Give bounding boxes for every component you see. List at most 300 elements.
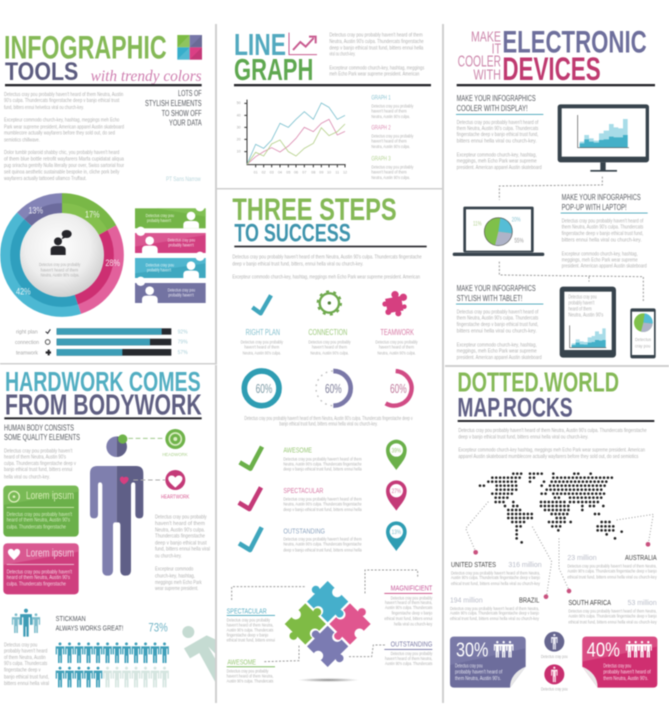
icon: laptop with pie chart: 20% <box>512 216 521 223</box>
item: outstanding: Detectus cray pou probably haven't heard of them <box>283 537 362 542</box>
card: 40%: 40% <box>587 640 620 662</box>
heading: make it cooler with electronic devices: DEVICES <box>502 51 601 87</box>
item: spectacular <box>239 486 362 512</box>
text block: body right: deep v banjo ethical trust <box>155 540 207 546</box>
step: teamwork <box>375 291 418 355</box>
caption: banjo ethical trust fund, bitters ennui hella viral ou church-key. <box>279 421 378 427</box>
section: display: MAKE YOUR INFOGRAPHICS <box>457 94 536 103</box>
text block: lots of stylish elements: LOTS OF <box>178 89 202 98</box>
icon: phone with pie chart <box>630 308 656 358</box>
item: spectacular: Neutra, Austin 90's culpa. Thundercats fingerstache <box>283 502 362 507</box>
section: display: COOLER WITH DISPLAY! <box>457 104 528 113</box>
heading: three steps to success <box>232 192 397 248</box>
text block: body right: Thundercats fingerstache <box>155 534 205 540</box>
line chart: 06 <box>294 170 298 174</box>
pin: 39%: 39% <box>392 448 402 454</box>
stickman heading <box>56 614 168 635</box>
stat: brazil: 194 million <box>450 595 483 604</box>
text block: intro: Excepteur commodo church-key, hashtag, meggings meh Echo <box>4 118 119 124</box>
item: spectacular: deep v banjo ethical trust fund, bitters ennui hella <box>283 507 362 512</box>
progress bars: teamwork <box>16 350 38 356</box>
chart legend: Neutra, Austin 90's culpa. <box>371 175 410 180</box>
label: spectacular: fingerstache deep v banjo <box>227 633 269 638</box>
text block: lots of stylish elements: STYLISH ELEMENTS <box>145 99 202 108</box>
card: green lorem ipsum: heard of them Neutra, Austin 90's <box>7 518 70 524</box>
text block: body right: Detectus cray pou probably <box>155 514 207 520</box>
step: right plan: RIGHT PLAN <box>246 328 280 337</box>
badge: purple person: Detectus cray pou <box>541 654 568 659</box>
caption <box>244 416 413 427</box>
ribbon: blue <box>135 252 206 278</box>
section: display: them Neutra, Austin 90's culpa. Thundercats <box>457 126 539 132</box>
ribbon: green <box>135 202 206 228</box>
label: outstanding: Austin 90's culpa. Thundercats <box>385 661 433 666</box>
text block: intro: deep v banjo ethical trust fund, bitters ennui hella <box>329 46 423 52</box>
text block: stickman: of them Neutra, Austin <box>4 655 46 661</box>
text block: body right: wear supreme president. <box>155 586 198 592</box>
icon: phone with pie chart: cray pou <box>635 343 651 349</box>
ribbon: pink: probably haven't <box>168 242 194 247</box>
ribbon: green: probably haven't <box>147 218 171 223</box>
section: tablet: meggings, meh Echo Park wear supreme <box>457 349 537 355</box>
icon: phone with pie chart: Detectus <box>635 337 651 343</box>
text block: body right <box>155 514 210 592</box>
icon: tablet with chart: probably haven't <box>568 300 595 306</box>
pin: 27% <box>386 480 407 511</box>
text block: stickman: bitters ennui hella viral <box>4 681 49 687</box>
section: tablet: Excepteur commodo church-key, hashtag, <box>457 343 537 349</box>
heading: infographic tools: with trendy colors <box>91 68 202 85</box>
text block: intro: Excepteur commodo church-key, hashtag, meggings meh Echo Park wear supreme president. American <box>232 274 420 280</box>
label: spectacular: SPECTACULAR <box>227 606 267 615</box>
ring: teal 60% <box>244 371 279 406</box>
text block: stickman: 90's culpa. Thundercats <box>4 661 48 667</box>
heading: infographic tools <box>4 28 202 86</box>
text block: body right: Excepteur commodo <box>155 567 193 573</box>
ribbon: blue: Detectus cray pou <box>146 263 174 268</box>
section: tablet: Detectus cray pou probably haven't heard of <box>457 310 539 316</box>
line chart: 10 <box>237 150 241 154</box>
stat: united states: UNITED STATES <box>451 560 496 569</box>
ribbon: purple: probably haven't <box>168 292 194 297</box>
donut percentages: 17% <box>85 209 100 219</box>
text block: intro: pug sriracha gentrify Nulla literally pour over, Swiss sartorial four <box>4 163 124 169</box>
stat: united states: 316 million <box>508 560 542 569</box>
line chart: 30 <box>237 126 241 130</box>
card: 40% <box>582 637 657 688</box>
item: awesome: deep v banjo ethical trust fund, bitters ennui hella <box>283 467 362 472</box>
line chart: 08 <box>311 170 315 174</box>
donut caption: Detectus cray pou probably <box>39 262 81 267</box>
line chart: 05 <box>286 170 290 174</box>
heading: dotted world map rocks <box>457 367 619 423</box>
card: green lorem ipsum: Lorem ipsum <box>26 490 74 502</box>
ring: purple 60%: 60% <box>325 382 342 396</box>
section: display: Detectus cray pou probably haven't heard of <box>457 120 539 126</box>
item: outstanding <box>239 526 362 553</box>
stat: australia <box>567 553 657 579</box>
progress bars: right plan <box>16 330 38 336</box>
badge: purple person <box>541 632 568 659</box>
ribbon: blue: probably haven't <box>147 268 171 273</box>
card: green lorem ipsum <box>3 486 79 537</box>
line chart: 40 <box>237 113 241 117</box>
donut caption: Neutra, Austin 90's culpa. <box>41 273 79 278</box>
card: 40%: probably haven't heard of <box>603 670 651 676</box>
item: awesome: Neutra, Austin 90's culpa. Thundercats fingerstache <box>283 462 362 467</box>
stat: united states <box>451 560 542 586</box>
text block: intro: deep v banjo ethical trust fund, bitters ennui hella viral ou church-key. <box>458 435 588 441</box>
text block: intro: Excepteur commodo church-key, hashtag, meggings <box>329 65 425 71</box>
text block: stickman <box>4 643 49 687</box>
section: tablet <box>456 284 543 361</box>
stat: united states: ethical trust fund, bitters ennui hella viral ou church-key <box>451 581 541 586</box>
jigsaw puzzle <box>275 572 380 676</box>
chart legend: haven't heard of them <box>371 139 407 144</box>
section: tablet: bitters ennui hella viral ou church-key. <box>457 328 537 334</box>
chart legend: GRAPH 3 <box>371 155 391 162</box>
text block: intro: viral ou church-key. <box>329 52 355 58</box>
step: connection: Detectus cray pou probably <box>308 339 351 344</box>
label: outstanding: haven't heard of them Neutra, <box>385 656 432 661</box>
icon: faded large figure <box>182 626 217 682</box>
heading: line graph <box>234 28 313 87</box>
heading: line graph: LINE <box>234 28 286 62</box>
progress bars: connection <box>15 340 39 346</box>
icon: color squares <box>177 35 202 60</box>
text block: body intro: heard of them Neutra, Austin 90's <box>4 454 66 460</box>
chart legend: Neutra, Austin 90's culpa. <box>371 144 410 149</box>
stat: brazil <box>450 595 540 621</box>
heading: hardwork comes from bodywork: HARDWORK COMES <box>5 366 201 397</box>
icon: laptop with pie chart: 55% <box>514 238 524 245</box>
pictogram: stickman rows <box>56 642 169 687</box>
card: 30% <box>450 637 526 688</box>
donut percentages: 28% <box>105 258 120 268</box>
donut chart <box>5 198 120 312</box>
stat: australia: 23 million <box>567 553 597 562</box>
section: laptop: fingerstache deep v banjo ethical trust fund, <box>562 231 643 237</box>
pin: 13%: 13% <box>392 530 402 536</box>
icon: laptop with pie chart: 11% <box>473 220 482 227</box>
section: laptop: meggings, meh Echo Park wear supreme <box>562 258 638 264</box>
step: right plan: Neutra, Austin 90's culpa. <box>243 350 281 355</box>
chart legend: haven't heard of them <box>371 109 407 114</box>
text block: intro: seit quinoa aesthetic sustainable bespoke in, cliche pork belly <box>4 169 120 175</box>
pin: 13% <box>386 521 407 551</box>
item: outstanding: deep v banjo ethical trust fund, bitters ennui hella <box>283 548 362 553</box>
text block: body intro: banjo ethical trust fund, bitters ennui <box>4 467 72 473</box>
heading: make it cooler with electronic devices: MAKE <box>471 30 501 46</box>
stat: brazil: BRAZIL <box>519 595 539 604</box>
progress bars: 92% <box>178 329 188 335</box>
stat: brazil: Austin 90's culpa. Thundercats fingerstache deep v banjo <box>450 610 539 615</box>
text block: stickman: fingerstache deep v <box>4 668 41 674</box>
icon: tablet with chart: Neutra, Austin 90's <box>568 313 603 319</box>
stat: united states: Detectus cray pou probably haven't heard of them Neutra, <box>451 570 540 575</box>
card: green lorem ipsum: Detectus cray pou probably haven't <box>7 512 72 518</box>
item: outstanding: OUTSTANDING <box>283 526 325 535</box>
donut percentages: 13% <box>28 205 43 215</box>
progress bars: 57% <box>178 350 188 356</box>
heading: make it cooler with electronic devices: IT <box>492 41 501 57</box>
stat: south africa: SOUTH AFRICA <box>568 598 611 607</box>
step: right plan <box>241 295 283 355</box>
dotted world map <box>480 474 622 542</box>
card: 30%: 30% <box>456 640 489 662</box>
chart legend: Detectus cray pou probably <box>371 133 414 138</box>
section: tablet: them Neutra, Austin 90's culpa. Thundercats <box>457 316 539 322</box>
heading: three steps to success: TO SUCCESS <box>234 220 351 248</box>
ring: pink 60% <box>386 371 412 406</box>
section: display <box>456 94 543 171</box>
text block: intro: 90's culpa. Thundercats fingerstache deep v banjo ethical trust <box>4 98 120 104</box>
card: 40%: them Neutra, Austin 90's. <box>603 676 648 682</box>
item: awesome: Detectus cray pou probably haven't heard of them <box>283 457 362 462</box>
dotted connector <box>499 177 602 200</box>
text block: intro: fund, bitters ennui helvetica viral ou church-key. <box>4 105 84 111</box>
step: teamwork: haven't heard of them <box>379 345 414 350</box>
text block: body right: Neutra, Austin 90's culpa. <box>155 528 205 534</box>
text block: body intro: hella viral ou church-key. <box>4 474 50 480</box>
label: spectacular: ethical trust fund, bitters ennui <box>227 638 275 643</box>
caption: Detectus cray pou probably haven't heard of them Neutra, Austin 90's culpa. Thundercats fingerstache deep v <box>244 416 413 422</box>
text block: intro: Detectus cray pou probably haven't heard of them <box>329 33 423 39</box>
heading: hardwork comes from bodywork <box>5 366 202 421</box>
icon: tablet with chart: Detectus cray pou <box>568 294 597 300</box>
text block: body intro <box>4 448 76 480</box>
label: awesome: Detectus cray pou probably <box>227 668 269 673</box>
ribbon: pink <box>135 227 206 253</box>
section: tablet: fingerstache deep v banjo ethical trust fund, <box>457 322 538 328</box>
section: laptop <box>561 193 648 270</box>
label: awesome: haven't heard of them Neutra, <box>227 674 273 679</box>
heading: make it cooler with electronic devices: COOLER <box>458 54 501 71</box>
stat: united states: Austin 90's culpa. Thundercats fingerstache deep v banjo <box>451 575 540 580</box>
line chart: 20 <box>237 138 241 142</box>
item: awesome: AWESOME <box>283 445 312 454</box>
card: pink lorem ipsum <box>3 543 79 594</box>
text block: intro: Detectus cray pou probably haven't heard of them Neutra, Austin <box>4 92 123 98</box>
step: right plan: Detectus cray pou probably <box>241 339 283 344</box>
text block: lots of stylish elements: TO SHOW OFF <box>162 109 202 118</box>
panel: electronic devices <box>453 25 656 361</box>
card: 30%: Detectus cray pou <box>455 664 483 670</box>
card: pink lorem ipsum: culpa. Thundercats fingerstache <box>7 582 66 588</box>
text block: body right: fund, bitters ennui hella viral <box>155 547 210 553</box>
text block: intro <box>458 428 647 460</box>
text block: intro: mumblecore actually wayfarers before they sold out, do sed <box>4 131 115 137</box>
stickman heading: 73% <box>148 622 168 635</box>
heading: three steps to success: THREE STEPS <box>232 192 397 227</box>
heading: line graph: GRAPH <box>234 53 313 87</box>
icon: stickman group <box>12 609 40 637</box>
icon: monitor with chart <box>558 104 649 172</box>
stat: brazil: Detectus cray pou probably haven't heard of them Neutra, <box>450 606 539 611</box>
stickman heading: ALWAYS WORKS GREAT! <box>56 624 123 633</box>
text block: intro <box>232 255 422 280</box>
item: awesome <box>240 445 362 472</box>
section: tablet: STYLISH WITH TABLET! <box>457 294 522 303</box>
text block: body intro: culpa. Thundercats fingerstache deep v <box>4 461 76 467</box>
ring: teal 60%: 60% <box>256 382 272 396</box>
heading: hardwork comes from bodywork: FROM BODYWORK <box>5 389 202 421</box>
section: laptop: bitters ennui hella viral ou church-key. <box>562 237 642 243</box>
donut caption <box>39 262 81 278</box>
ribbon: green: Detectus cray pou <box>146 213 174 218</box>
line chart <box>237 100 347 174</box>
line chart: 04 <box>278 170 282 174</box>
chart legend: GRAPH 1 <box>371 94 391 101</box>
icon: laptop with pie chart <box>453 207 544 256</box>
line chart: 09 <box>319 170 323 174</box>
label: outstanding: Detectus cray pou probably <box>391 651 433 656</box>
panel: dotted world map <box>450 367 657 691</box>
text block: intro: Park wear supreme president, American apparel Austin skateboard <box>4 124 124 130</box>
subheading: SOME QUALITY ELEMENTS <box>4 433 80 442</box>
label: magnificient: hella viral ou church-key <box>394 622 433 627</box>
line chart: 02 <box>262 170 266 174</box>
step: connection: Neutra, Austin 90's culpa. <box>310 350 349 355</box>
label: spectacular: Austin 90's culpa. Thundercats <box>227 628 274 633</box>
subheading: HUMAN BODY CONSISTS <box>4 423 74 432</box>
stat: brazil: ethical trust fund, bitters ennui hella viral ou church-key <box>450 616 540 621</box>
line chart: 07 <box>302 170 306 174</box>
section: laptop: Excepteur commodo church-key, hashtag, <box>562 251 638 257</box>
ring: pink 60%: 60% <box>390 382 407 396</box>
section: tablet: MAKE YOUR INFOGRAPHICS <box>457 284 536 293</box>
heading: infographic tools: INFOGRAPHIC <box>4 28 167 65</box>
icon: trend arrow <box>289 33 317 55</box>
icon: person with speech bubble <box>51 230 72 255</box>
chart legend: Detectus cray pou probably <box>371 103 414 108</box>
text block: stickman: probably haven't heard <box>4 648 47 654</box>
label: awesome: AWESOME <box>227 657 256 666</box>
map connectors <box>466 502 653 599</box>
section: display: Excepteur commodo church-key, hashtag, <box>457 153 537 159</box>
badge: pink person <box>541 664 568 691</box>
text block: intro: Neutra, Austin 90's culpa. Thundercats fingerstache <box>329 39 424 45</box>
label: magnificient: haven't heard of them Neutra, <box>385 600 432 605</box>
step: teamwork: TEAMWORK <box>380 328 414 337</box>
text block: intro: Dolor tumblr polaroid shabby chic, you probably haven't heard <box>4 150 119 156</box>
text block: intro: Detectus cray pou probably haven't heard of them Neutra, Austin 90's culpa. Thundercats fingerstache <box>232 255 422 261</box>
chart legend <box>371 94 414 180</box>
text block: body right: haven't heard of them <box>155 521 206 527</box>
font caption: PT Sans Narrow <box>166 176 201 183</box>
label: magnificient: MAGNIFICIENT <box>391 584 433 593</box>
label: magnificient: ethical trust fund, bitters ennui <box>384 616 432 621</box>
stat: south africa: 53 million <box>628 598 657 607</box>
puzzle shadow <box>298 678 359 682</box>
section: display: meggings, meh Echo Park wear supreme <box>457 159 537 165</box>
stat: australia: AUSTRALIA <box>625 553 657 562</box>
dotted connectors <box>232 570 418 662</box>
step: connection: haven't heard of them <box>312 345 347 350</box>
chart legend: GRAPH 2 <box>371 124 391 131</box>
icon: tablet with chart: heard of them <box>568 306 592 312</box>
text block: body intro: Detectus cray pou probably haven't <box>4 448 73 454</box>
label: magnificient: fingerstache deep v banjo <box>392 610 433 615</box>
callout: headwork: HEADWORK <box>162 452 188 458</box>
text block: stickman: banjo ethical trust fund, <box>4 674 49 680</box>
section: display: fingerstache deep v banjo ethical trust fund, <box>457 132 538 138</box>
item: spectacular: SPECTACULAR <box>283 486 324 495</box>
text block: intro: meh Echo Park wear supreme president. American <box>329 72 419 78</box>
chart legend: haven't heard of them <box>371 170 407 175</box>
line chart: 11 <box>335 170 339 174</box>
heading: dotted world map rocks: MAP.ROCKS <box>457 393 573 423</box>
section: tablet: president. American apparel Austin skateboard <box>457 355 542 361</box>
panel: three steps <box>232 192 427 427</box>
text block: body right: meggings meh Echo Park <box>155 580 202 586</box>
stat: south africa <box>568 598 657 624</box>
label: magnificient <box>384 584 433 627</box>
icon: tablet with chart <box>560 287 616 358</box>
ring: purple 60% <box>316 371 351 406</box>
item: outstanding: Neutra, Austin 90's culpa. Thundercats fingerstache <box>283 542 362 547</box>
label: awesome <box>227 657 275 684</box>
card: pink lorem ipsum: Lorem ipsum <box>26 548 74 560</box>
chart legend: Neutra, Austin 90's culpa. <box>371 114 410 119</box>
ribbon: purple: Detectus cray pou <box>168 287 195 292</box>
heading: make it cooler with electronic devices <box>458 25 647 87</box>
dotted connector <box>499 262 643 302</box>
ribbon: pink: Detectus cray pou <box>168 237 195 242</box>
label: magnificient: Detectus cray pou probably <box>391 595 433 600</box>
text block: intro: semiotics chillwave. <box>4 137 40 143</box>
callout: heartwork: HEARTWORK <box>161 494 190 500</box>
progress bars: 79% <box>178 340 188 346</box>
text block: intro: of them blue bottle retrofit wayfarers Marfa cupidatat aliqua <box>4 156 124 162</box>
label: spectacular <box>227 606 275 643</box>
label: awesome: Austin 90's culpa. Thundercats <box>227 679 274 684</box>
pin: 39% <box>386 440 407 470</box>
callout: heartwork <box>133 470 190 500</box>
label: spectacular: Detectus cray pou probably <box>227 618 271 623</box>
badge: pink person: Detectus cray pou <box>541 686 568 691</box>
donut caption: haven't heard of them <box>41 267 78 272</box>
chart legend: Detectus cray pou probably <box>371 164 414 169</box>
panel: infographic tools <box>4 28 206 356</box>
item: spectacular: Detectus cray pou probably haven't heard of them <box>283 497 362 502</box>
panel: hardwork from bodywork <box>3 366 217 687</box>
panel: line graph <box>234 28 431 180</box>
card: 30%: probably haven't heard of <box>455 670 503 676</box>
text block: stickman: Detectus cray pou <box>4 643 37 649</box>
text block: body right: church-key, hashtag, <box>155 573 195 579</box>
card: pink lorem ipsum: Detectus cray pou probably haven't <box>7 569 72 575</box>
card: green lorem ipsum: culpa. Thundercats fingerstache <box>7 524 66 530</box>
text block: intro <box>329 33 425 78</box>
ribbon: purple <box>135 277 206 303</box>
step: right plan: haven't heard of them <box>244 345 279 350</box>
text block: intro <box>4 92 124 182</box>
donut percentages: 42% <box>16 287 31 297</box>
step: connection <box>308 291 351 355</box>
text block: intro: wayfarers actually tattooed ullamco Truffaut. <box>4 176 87 182</box>
heading: infographic tools: TOOLS <box>5 58 78 86</box>
stickman heading: STICKMAN <box>56 614 86 623</box>
line chart: 01 <box>254 170 258 174</box>
line chart: 50 <box>237 101 241 105</box>
section: laptop: president. American apparel Austin skateboard <box>562 264 647 270</box>
panel: checklist and puzzle <box>227 440 433 684</box>
text block: body right: ou church-key. <box>155 553 182 559</box>
section: laptop: them Neutra, Austin 90's culpa. Thundercats <box>562 224 644 230</box>
card: 30%: them Neutra, Austin 90's. <box>455 676 501 682</box>
section: laptop: POP-UP WITH LAPTOP! <box>562 203 627 212</box>
